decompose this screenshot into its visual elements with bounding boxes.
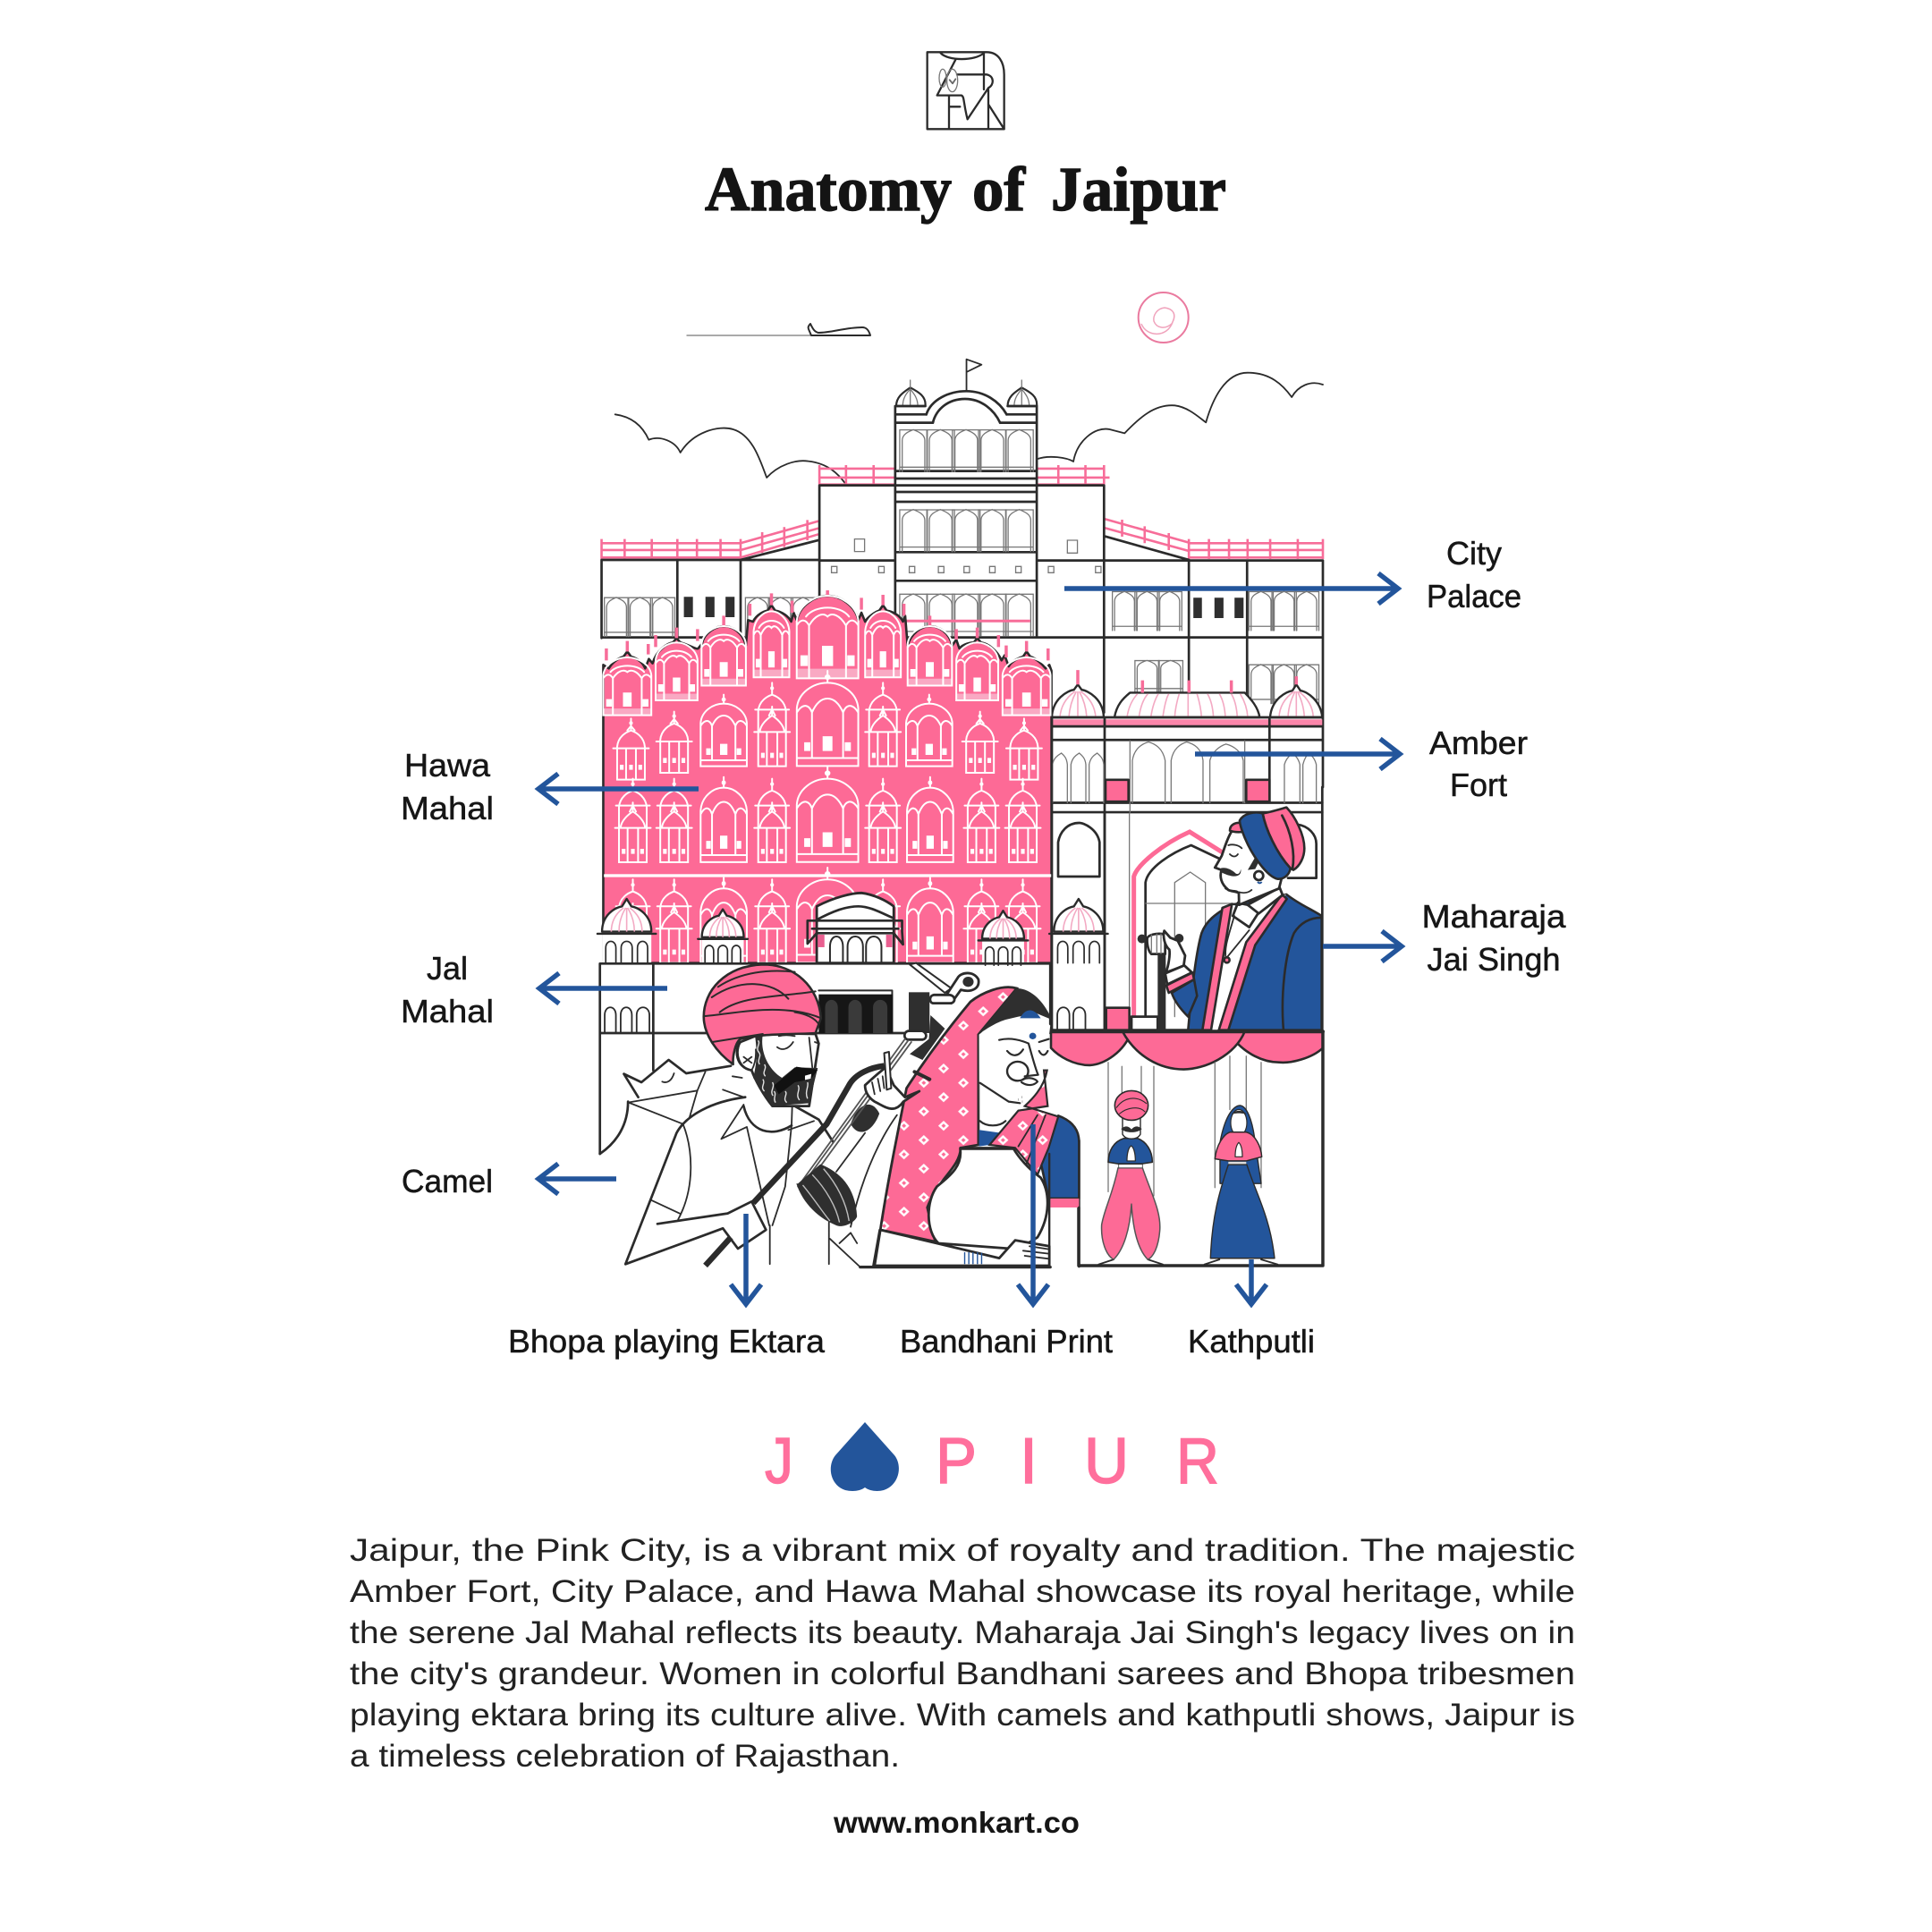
pink swag awning (1051, 1031, 1323, 1070)
label: Jal Mahal: Mahal (401, 993, 494, 1030)
Amber Fort roofline and arcades (1052, 670, 1322, 1030)
label: Amber Fort (1429, 724, 1528, 803)
domes (1052, 670, 1322, 717)
Jaipur wordmark with drop: J (765, 1426, 793, 1497)
spire finials (606, 590, 1048, 660)
ektara head (904, 963, 979, 1060)
central balcony (808, 893, 903, 963)
camel (600, 1060, 745, 1154)
dark arcade windows (818, 990, 929, 1033)
label: Jal Mahal (401, 950, 494, 1030)
water pot (928, 1148, 1049, 1266)
label: Hawa Mahal: Hawa (404, 747, 491, 784)
description paragraph: the serene Jal Mahal reflects its beauty. Maharaja Jai Singh's legacy lives on in (350, 1615, 1575, 1650)
label: City Palace: Palace (1427, 578, 1521, 614)
pink arch frame (1134, 832, 1224, 1016)
label: Maharaja Jai Singh: Maharaja (1422, 898, 1567, 935)
label: Hawa Mahal (401, 747, 494, 826)
title: Anatomy (705, 156, 952, 225)
tower domes (896, 380, 1037, 406)
label: Bandhani Print: Bandhani Print (900, 1323, 1113, 1360)
pink roof railings (602, 465, 1323, 559)
label: Camel: Camel (402, 1163, 493, 1199)
label: Maharaja Jai Singh (1422, 898, 1567, 978)
dark slit windows (684, 597, 1243, 618)
pink cornice strip (1052, 719, 1322, 725)
logo: monkart face mark (928, 52, 1004, 129)
Jal Mahal lower walls (600, 963, 1086, 1154)
arrow: Jal Mahal (539, 973, 667, 1004)
label: City Palace (1427, 535, 1521, 614)
puppet: man (1098, 1090, 1163, 1265)
Jaipur wordmark with drop: R (1176, 1426, 1219, 1497)
arrow: Bandhani Print (1018, 1124, 1048, 1304)
small square windows (832, 539, 1101, 572)
Maharaja Jai Singh panel (1035, 787, 1322, 1030)
label: Kathputli: Kathputli (1188, 1323, 1315, 1360)
Jaipur wordmark with drop: U (1084, 1426, 1129, 1497)
coat (1188, 894, 1322, 1030)
puppet: woman (1205, 1106, 1277, 1265)
arrow: Amber Fort (1195, 739, 1400, 769)
Camel, Bhopa and Bandhani woman figures (600, 963, 1079, 1267)
arrow: Hawa Mahal (538, 774, 699, 804)
puppet strings (1108, 1056, 1261, 1196)
collar and necklace (1224, 887, 1283, 962)
title: of (972, 156, 1026, 225)
second row windows (613, 671, 1042, 780)
third row windows (615, 767, 1041, 862)
clouds (615, 373, 1323, 485)
website url: www.monkart.co (833, 1806, 1080, 1839)
chhatri domes (597, 899, 1108, 965)
icon: blue drop heart (831, 1422, 899, 1491)
label: Hawa Mahal: Mahal (401, 790, 494, 826)
woman arm and skirt hem (860, 1230, 1050, 1267)
description paragraph: Amber Fort, City Palace, and Hawa Mahal showcase its royal heritage, while (350, 1574, 1575, 1609)
label: Bhopa playing Ektara: Bhopa playing Ektara (508, 1323, 826, 1360)
arcade lines (1052, 717, 1322, 1030)
woman face (979, 988, 1052, 1125)
staff knob and hand (1147, 931, 1185, 972)
upper row balconies (603, 596, 1051, 716)
ektara strings and gourd (796, 1039, 911, 1227)
fourth row windows (615, 868, 1041, 963)
face (1215, 823, 1282, 905)
arrow: Kathputli (1236, 1259, 1267, 1304)
arrow: Camel (538, 1164, 616, 1194)
City Palace building (602, 360, 1323, 787)
pink squares (1106, 780, 1269, 801)
icon: sun (1139, 292, 1189, 343)
arrow: City Palace (1064, 573, 1398, 604)
Hawa Mahal pink facade (597, 590, 1108, 965)
bhopa head (737, 1033, 818, 1106)
label: Maharaja Jai Singh: Jai Singh (1428, 941, 1560, 978)
woman saree (880, 987, 1017, 1241)
label: City Palace: City (1446, 535, 1502, 572)
Jaipur wordmark with drop (765, 1422, 1219, 1497)
Kathputli puppets stage (1079, 1031, 1323, 1266)
turban (1230, 808, 1304, 879)
label: Jal Mahal: Jal (427, 950, 468, 987)
Jaipur wordmark with drop: P (936, 1426, 977, 1497)
bow (706, 1066, 885, 1266)
bhopa body (625, 1097, 903, 1267)
Jaipur wordmark with drop: I (1020, 1426, 1038, 1497)
title (705, 156, 1226, 225)
building walls (602, 391, 1323, 787)
label: Amber Fort: Fort (1450, 767, 1507, 803)
label: Amber Fort: Amber (1429, 724, 1528, 761)
description paragraph: the city's grandeur. Women in colorful Bandhani sarees and Bhopa tribesmen (350, 1657, 1575, 1691)
bhopa turban (704, 964, 821, 1064)
description paragraph: a timeless celebration of Rajasthan. (350, 1739, 900, 1774)
arrow: Bhopa playing Ektara (731, 1214, 761, 1304)
right hand on string (865, 1067, 919, 1109)
description paragraph: playing ektara bring its culture alive. With camels and kathputli shows, Jaipur is (350, 1698, 1575, 1733)
flag (967, 360, 981, 391)
title: Jaipur (1051, 156, 1226, 225)
description paragraph (350, 1533, 1575, 1774)
description paragraph: Jaipur, the Pink City, is a vibrant mix of royalty and tradition. The majestic (350, 1533, 1575, 1568)
arched windows (605, 429, 1319, 704)
icon: airplane with trail (687, 324, 870, 335)
woman lower: blouse and sleeve (979, 1013, 1079, 1267)
arrow: Maharaja Jai Singh (1323, 931, 1402, 962)
